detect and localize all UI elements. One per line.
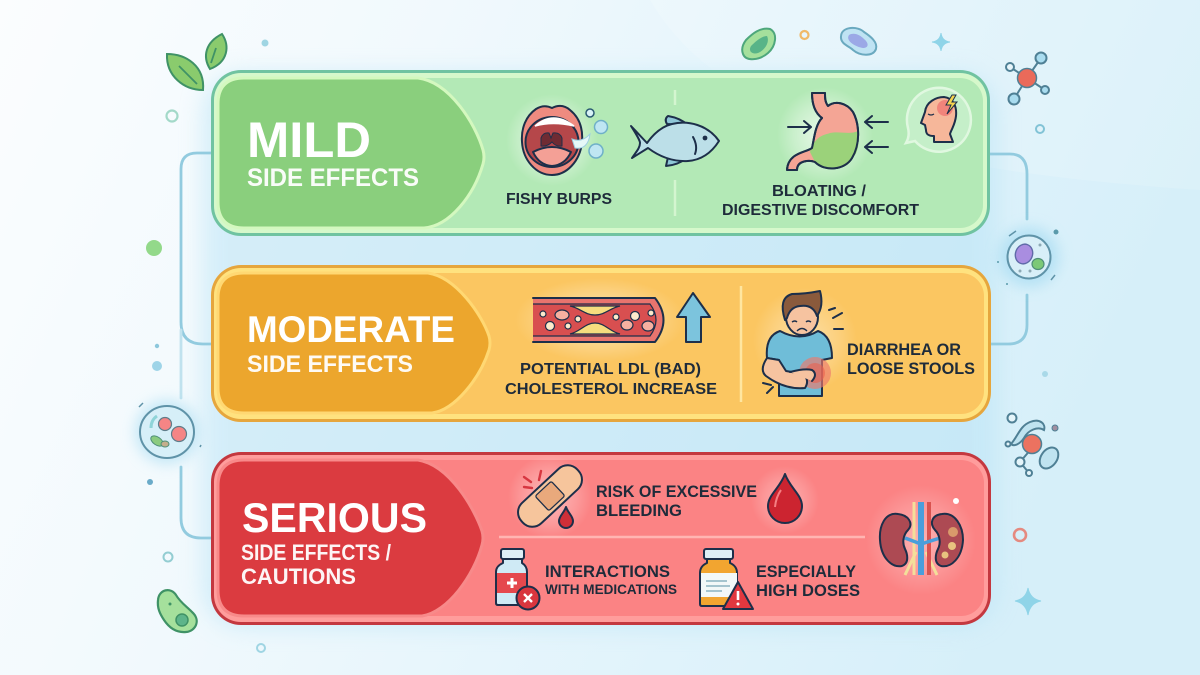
label: bloating: BLOATING / bbox=[772, 183, 867, 200]
label: diarrhea or: DIARRHEA OR bbox=[847, 340, 961, 359]
arrows pressing on stomach bbox=[788, 116, 888, 153]
decorative dot right bbox=[1042, 371, 1048, 377]
label: bleeding: BLEEDING bbox=[596, 501, 682, 520]
decorative dots top left bbox=[166, 40, 268, 122]
icon: molecule top right bbox=[1006, 52, 1049, 104]
label: risk of excessive: RISK OF EXCESSIVE bbox=[596, 482, 757, 501]
label: interactions: INTERACTIONS bbox=[545, 562, 670, 581]
label: high doses: HIGH DOSES bbox=[756, 581, 860, 600]
icon: cell right bbox=[997, 227, 1059, 287]
label: fishy burps: FISHY BURPS bbox=[506, 191, 612, 208]
icon: green bacterium bottom bbox=[158, 590, 197, 632]
subheading: side effects: SIDE EFFECTS bbox=[247, 351, 413, 378]
icon: bandage with drop bbox=[508, 455, 592, 539]
icon: fish bbox=[631, 116, 719, 166]
subheading: cautions: CAUTIONS bbox=[241, 564, 356, 589]
label: cholesterol increase: CHOLESTEROL INCREASE bbox=[505, 381, 717, 398]
decorative ring orange bbox=[800, 31, 808, 39]
icon: sparkle top bbox=[932, 33, 950, 51]
icon: leaves bbox=[167, 34, 226, 90]
icon: kidneys bbox=[866, 485, 976, 595]
divider bbox=[499, 536, 865, 538]
label: especially: ESPECIALLY bbox=[756, 562, 857, 581]
decorative ring coral bbox=[1014, 529, 1026, 541]
subheading: side effects: SIDE EFFECTS bbox=[247, 164, 419, 192]
label: with medications: WITH MEDICATIONS bbox=[545, 582, 677, 597]
decorative ring bbox=[1036, 125, 1044, 133]
mild label shape bbox=[218, 78, 484, 228]
icon: medicine bottle with x bbox=[496, 549, 540, 610]
panel: serious side effects bbox=[211, 452, 991, 625]
panel: moderate side effects bbox=[211, 265, 991, 422]
icon: stomach bbox=[777, 87, 888, 183]
panel: mild side effects bbox=[211, 70, 990, 236]
icon: blue bacterium top bbox=[841, 28, 876, 55]
heading: moderate: MODERATE bbox=[247, 309, 455, 350]
connector lines bbox=[181, 153, 1027, 538]
divider bbox=[740, 286, 742, 402]
icon: blood drop bbox=[751, 466, 819, 534]
heading: mild: MILD bbox=[247, 112, 371, 168]
heading: serious: SERIOUS bbox=[242, 494, 427, 541]
icon: up arrow bbox=[677, 293, 710, 342]
label: potential ldl: POTENTIAL LDL (BAD) bbox=[520, 361, 701, 378]
icon: artery with plaque bbox=[515, 278, 685, 362]
icon: molecule lower right bbox=[1006, 414, 1062, 476]
serious label shape bbox=[218, 460, 483, 616]
label: loose stools: LOOSE STOOLS bbox=[847, 359, 975, 378]
icon: sparkle lower right bbox=[1015, 588, 1041, 615]
icon: person with stomach pain bbox=[753, 288, 857, 396]
icon: pill bottle with warning bbox=[700, 549, 753, 609]
icon: open mouth with bubbles bbox=[506, 94, 608, 186]
icon: green bacterium top bbox=[742, 29, 775, 59]
divider bbox=[674, 90, 676, 216]
icon: cell left bbox=[135, 400, 201, 464]
label: digestive discomfort: DIGESTIVE DISCOMFORT bbox=[722, 202, 919, 219]
decorative dots left bbox=[146, 240, 265, 652]
subheading: side effects: SIDE EFFECTS / bbox=[241, 540, 391, 565]
moderate label shape bbox=[218, 273, 490, 413]
icon: headache speech bubble bbox=[906, 88, 971, 152]
